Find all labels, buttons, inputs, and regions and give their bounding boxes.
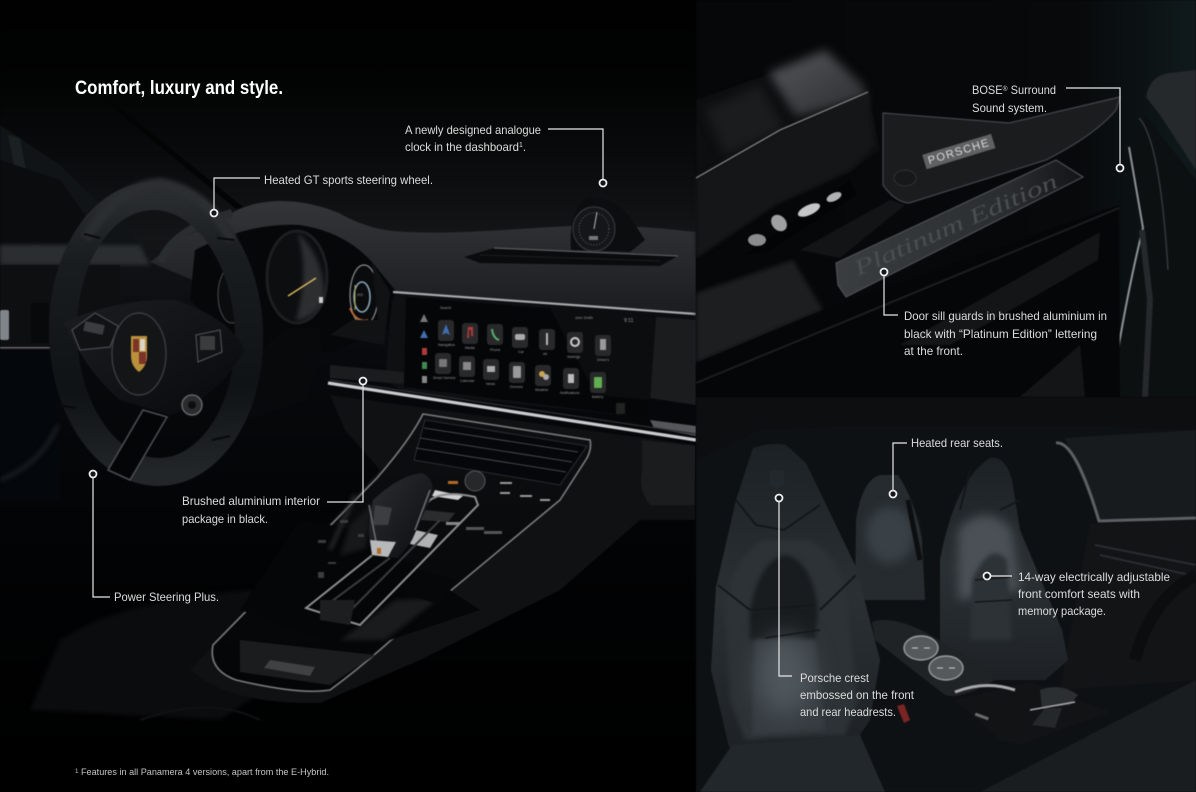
parking brake switch [320, 600, 355, 625]
callout: power steering [90, 470, 219, 604]
Porsche crest [131, 336, 147, 372]
clock pod [571, 197, 645, 252]
callout: steering wheel: Heated GT sports steering wheel. [264, 174, 433, 187]
binnacle shadow arch [160, 213, 232, 262]
steering wheel hub [64, 300, 245, 415]
callout: door sill guards: black with “Platinum Edition” lettering [904, 328, 1097, 341]
dashboard cover [150, 201, 696, 330]
central touch screen: Notifications [560, 391, 580, 395]
seat belt latch [897, 704, 910, 723]
central touch screen: Search [440, 306, 451, 310]
callout: heated rear seats: Heated rear seats. [911, 437, 1003, 450]
central touch screen: Battery [592, 395, 604, 399]
callout: brushed aluminium: Brushed aluminium interior [182, 495, 320, 508]
callout: BOSE sound: BOSE [972, 84, 1004, 97]
steering wheel [1135, 575, 1196, 660]
door sill guard plate [836, 160, 1083, 297]
callout: power steering: Power Steering Plus. [114, 591, 219, 604]
callout: analogue clock: . [523, 141, 526, 154]
door sill guard plate: Platinum Edition [849, 168, 1061, 281]
front driver seat [700, 444, 885, 792]
brushed aluminium trim [328, 365, 696, 440]
central touch screen: John Smith [575, 316, 593, 320]
callout: analogue clock: A newly designed analogue [405, 124, 541, 137]
centre console [212, 414, 591, 691]
seat controls [745, 180, 856, 255]
central touch screen: Devices [510, 385, 523, 389]
centre console [955, 682, 1110, 745]
air vent slats [414, 420, 587, 485]
panel: dashboard photo [0, 0, 696, 792]
instrument cluster dials [218, 231, 378, 325]
instrument cluster dials: 202 [357, 293, 363, 297]
central touch screen: Navigation [438, 343, 455, 347]
armrest and cupholders [872, 620, 995, 696]
central touch screen: News [486, 382, 495, 386]
central touch screen: Weather [535, 388, 549, 392]
rear seat [855, 475, 925, 600]
side window and pillars [0, 97, 243, 247]
page title: Comfort, luxury and style. [75, 78, 283, 99]
callout: comfort seats: memory package. [1018, 605, 1106, 618]
callout: Porsche crest [776, 494, 915, 719]
driver seat and floor [30, 590, 340, 720]
central touch screen: Phone [490, 348, 500, 352]
callout: BOSE sound: Sound system. [972, 102, 1047, 115]
steering wheel [56, 183, 254, 480]
spoke buttons [72, 313, 222, 362]
carpet mat with Porsche tag [883, 97, 1120, 203]
central touch screen: 9:11 [624, 318, 634, 324]
callout: analogue clock [405, 124, 606, 186]
callout: door sill guards: Door sill guards in brushed aluminium in [904, 310, 1107, 323]
carpet strip [800, 200, 905, 258]
footnote: Features in all Panamera 4 versions, apart from the E-Hybrid. [78, 767, 329, 777]
callout: comfort seats: 14-way electrically adjustable [1018, 571, 1170, 584]
steering column stalk [240, 328, 322, 420]
central touch screen: Media [465, 346, 475, 350]
carpet mat with Porsche tag: PORSCHE [927, 137, 991, 167]
binnacle lower hood [330, 262, 390, 345]
panel: seats photo [696, 397, 1196, 792]
central touch screen [385, 297, 656, 418]
callout: Porsche crest: Porsche crest [800, 672, 870, 685]
front seat [696, 50, 880, 258]
callout: door sill guards [880, 268, 1107, 358]
front dash edge [980, 680, 1196, 792]
callout: BOSE sound [972, 84, 1124, 172]
door panel [1060, 520, 1196, 690]
drive mode dial [182, 395, 202, 415]
callout: Porsche crest: embossed on the front [800, 689, 915, 702]
callout: BOSE sound: Surround [1008, 84, 1056, 97]
lower dash and console body [190, 395, 695, 703]
airbag centre [112, 313, 166, 395]
central touch screen: Car [518, 350, 525, 354]
central touch screen: Driver's [597, 358, 609, 362]
gear selector [369, 473, 433, 558]
central touch screen: Calendar [460, 379, 475, 383]
callout: BOSE sound: ® [1003, 85, 1008, 93]
door arch and trim [1116, 70, 1196, 397]
door panel [0, 265, 120, 500]
console buttons [318, 520, 364, 578]
callout: Porsche crest: and rear headrests. [800, 706, 896, 719]
chrome strip above screen [393, 292, 696, 314]
side window [1056, 430, 1196, 522]
right-hand dash panel [650, 317, 696, 436]
callout: analogue clock: 1 [519, 142, 523, 149]
door sill light band [0, 245, 150, 265]
headliner [696, 397, 1196, 460]
central touch screen: Air [543, 352, 548, 356]
callout: door sill guards: at the front. [904, 345, 963, 358]
gear surround [306, 494, 478, 625]
climate controls [400, 471, 550, 605]
callout: comfort seats [984, 571, 1170, 618]
central touch screen: Smart Service [433, 376, 456, 380]
front passenger seat [940, 458, 1068, 680]
footnote: 1 [75, 769, 79, 775]
callout: brushed aluminium [182, 378, 366, 526]
callout: steering wheel [210, 174, 433, 216]
callout: analogue clock: clock in the dashboard [405, 141, 521, 154]
sill body [696, 205, 1120, 397]
callout: brushed aluminium: package in black. [182, 513, 268, 526]
panel: door sill photo [696, 0, 1196, 397]
lower spoke [108, 410, 167, 480]
central touch screen: Settings [567, 355, 580, 359]
callout: comfort seats: front comfort seats with [1018, 588, 1140, 601]
instrument binnacle [190, 225, 395, 352]
dashboard vent [464, 248, 678, 266]
callout: heated rear seats [890, 437, 1003, 498]
